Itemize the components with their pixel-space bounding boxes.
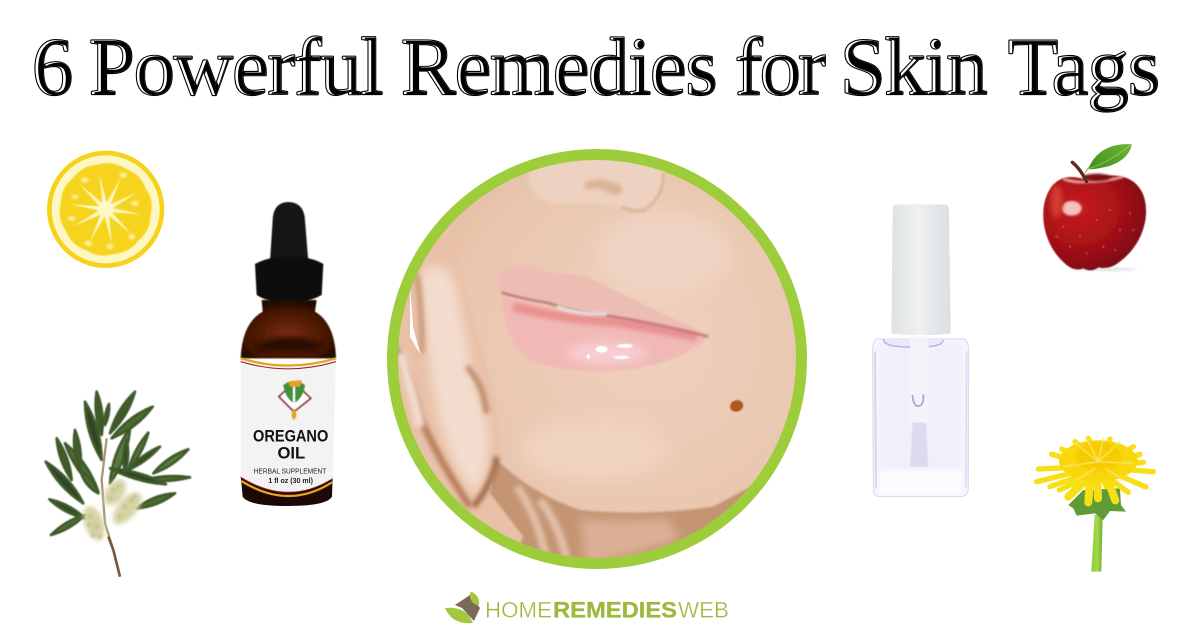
- title: Tags: [1008, 21, 1159, 112]
- icon: oregano oil bottle: OIL: [277, 444, 305, 463]
- bottle base: [241, 475, 333, 506]
- lip gloss: [587, 344, 633, 359]
- hand: [484, 458, 524, 543]
- label: [241, 358, 336, 492]
- sepals: [1068, 488, 1126, 520]
- title: Tags: [1008, 21, 1159, 112]
- nose: [528, 160, 662, 208]
- dropper bulb: [270, 202, 308, 262]
- neck: [490, 461, 750, 558]
- skin: [450, 170, 796, 514]
- photo: face with skin tag: [392, 153, 807, 573]
- icon: nail polish bottle: [873, 204, 969, 497]
- title: for: [735, 21, 825, 112]
- title: Skin: [843, 22, 989, 113]
- title: Skin: [840, 21, 986, 112]
- stem: [102, 438, 120, 577]
- logo wordmark: HOME: [485, 598, 552, 622]
- icon: oregano oil bottle: 1 fl oz (30 ml): [268, 476, 314, 485]
- white sliver: [410, 287, 421, 355]
- petals: [1037, 438, 1153, 502]
- title: Powerful: [92, 22, 385, 113]
- flower clusters: [79, 475, 147, 543]
- title: 6: [32, 21, 73, 112]
- title: Skin: [840, 21, 986, 112]
- cap: [891, 204, 951, 335]
- skin tag: [729, 399, 744, 413]
- title: Powerful: [89, 21, 383, 112]
- title: Remedies: [404, 22, 719, 113]
- logo wordmark: [485, 598, 729, 622]
- stalk: [1091, 515, 1103, 572]
- label stripes: [241, 358, 336, 365]
- bristles: [910, 423, 928, 467]
- label emblem: [279, 380, 311, 420]
- shadow: [1070, 267, 1137, 271]
- title: for: [738, 22, 828, 113]
- icon: dandelion: [1037, 438, 1153, 572]
- lower lip: [503, 297, 708, 371]
- logo icon: house and leaf: [445, 592, 480, 623]
- icon: oregano oil bottle: [241, 202, 336, 506]
- icon: lemon slice: [47, 151, 164, 268]
- title: [34, 35, 1158, 113]
- lip parting: [502, 293, 708, 337]
- icon: oregano oil bottle: HERBAL SUPPLEMENT: [254, 466, 327, 475]
- fruit: [1043, 175, 1146, 270]
- logo wordmark: WEB: [678, 598, 729, 622]
- upper lip: [495, 266, 708, 335]
- icon: tea tree sprig: [46, 392, 190, 577]
- green ring: [392, 154, 802, 564]
- dropper cap: [255, 257, 323, 303]
- leaf: [1088, 144, 1132, 169]
- label text: OREGANO: [253, 426, 328, 445]
- title: Tags: [1011, 22, 1162, 113]
- title: Remedies: [401, 21, 716, 112]
- title: 6: [35, 22, 76, 113]
- title: Powerful: [89, 21, 383, 112]
- title: for: [735, 21, 825, 112]
- icon: apple: [1043, 144, 1146, 271]
- title: 6: [32, 21, 73, 112]
- neck ring: [883, 339, 943, 347]
- stem: [1072, 162, 1087, 182]
- brush stem: [910, 337, 929, 423]
- title: Remedies: [401, 21, 716, 112]
- logo wordmark: REMEDIES: [553, 598, 677, 622]
- glass shoulder: [241, 300, 336, 358]
- glass: [873, 339, 969, 497]
- logo: Home Remedies Web: [445, 592, 729, 623]
